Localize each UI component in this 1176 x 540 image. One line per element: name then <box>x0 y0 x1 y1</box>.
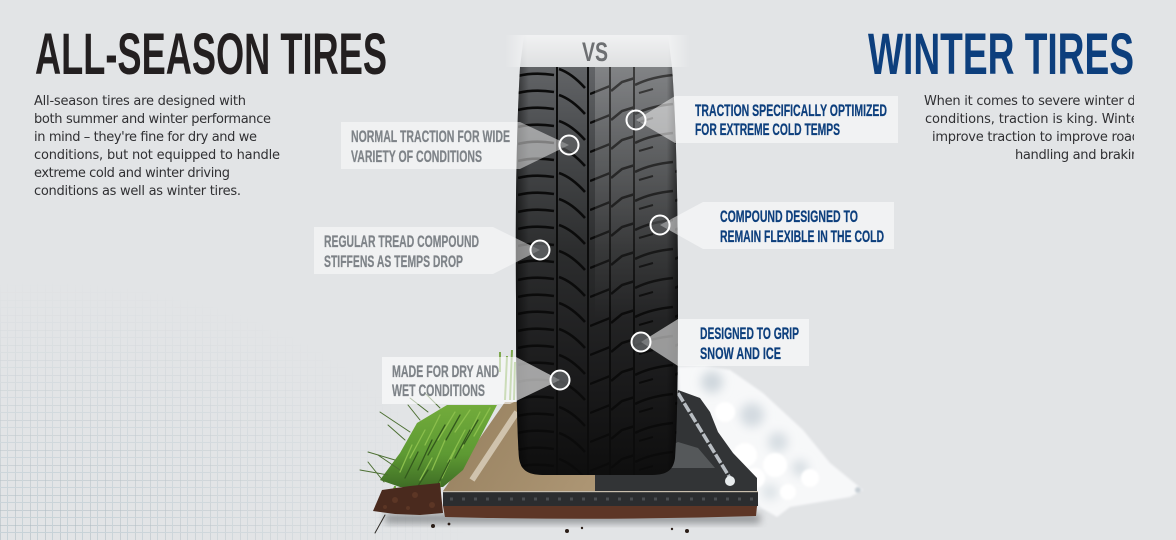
callout: regular tread compound <box>314 227 550 274</box>
soil slab front <box>443 506 757 519</box>
grass back tuft <box>500 350 515 400</box>
callout: snow and ice <box>632 319 809 366</box>
asphalt surface <box>595 390 757 491</box>
vs band <box>505 35 690 67</box>
heading: all-season tires: ALL-SEASON TIRES <box>35 22 387 87</box>
text block: all-season description: extreme cold and winter driving <box>34 166 230 181</box>
text block: all-season description: All-season tires are designed with <box>34 94 246 109</box>
callout: flexible compound: COMPOUND DESIGNED TO <box>720 207 858 226</box>
callout: flexible compound <box>650 202 894 249</box>
text block: all-season description: conditions as well as winter tires. <box>34 184 241 199</box>
callout: snow and ice: DESIGNED TO GRIP <box>700 324 799 343</box>
tread pattern <box>516 67 678 475</box>
callout: dry and wet: WET CONDITIONS <box>392 381 485 400</box>
callout: flexible compound: REMAIN FLEXIBLE IN THE COLD <box>720 227 884 246</box>
illustration: tire <box>516 35 678 475</box>
callout: dry and wet: MADE FOR DRY AND <box>392 362 499 381</box>
soil clump <box>373 483 443 515</box>
grass blades <box>360 393 490 533</box>
road stripe <box>678 393 730 478</box>
dirt surface <box>443 402 595 491</box>
text block: winter description: conditions, traction is king. Winter tires <box>925 112 1176 127</box>
callout: traction optimized: TRACTION SPECIFICALLY OPTIMIZED <box>695 101 887 120</box>
text block: all-season description: in mind – they're fine for dry and we <box>34 130 257 145</box>
text block: all-season description <box>34 94 280 199</box>
text block: winter description: improve traction to improve road <box>932 130 1140 145</box>
text block: all-season description: conditions, but not equipped to handle <box>34 148 280 163</box>
debris <box>431 523 689 533</box>
dirt stripe <box>472 412 517 480</box>
callout: regular tread compound: STIFFENS AS TEMPS DROP <box>324 252 463 271</box>
callout: normal traction <box>341 122 578 169</box>
callout: traction optimized: FOR EXTREME COLD TEMPS <box>695 120 840 139</box>
illustration: ground slab with grass and snow <box>360 350 863 533</box>
background graph-paper grid <box>0 310 420 540</box>
grass <box>380 405 497 487</box>
callout: traction optimized <box>626 96 898 143</box>
slab top highlight <box>443 491 758 492</box>
ground shadow <box>385 514 760 523</box>
asphalt slab front <box>443 492 758 506</box>
callout: regular tread compound: REGULAR TREAD COMPOUND <box>324 232 479 251</box>
text block: all-season description: both summer and winter performance <box>34 112 271 127</box>
tire top ghost above band <box>520 35 672 67</box>
callout: dry and wet <box>382 357 570 404</box>
callout: normal traction: NORMAL TRACTION FOR WIDE <box>351 127 510 146</box>
callout: snow and ice: SNOW AND ICE <box>700 344 781 363</box>
vs label: VS <box>582 37 608 67</box>
text block: winter description: When it comes to severe winter driving <box>924 94 1171 109</box>
text block: winter description: handling and braking. <box>1015 148 1151 163</box>
text block: winter description <box>924 95 1134 162</box>
snow pile <box>678 366 863 517</box>
callout: normal traction: VARIETY OF CONDITIONS <box>351 147 482 166</box>
asphalt aggregate <box>450 498 755 500</box>
tire body <box>516 67 678 475</box>
soil texture <box>383 492 435 510</box>
